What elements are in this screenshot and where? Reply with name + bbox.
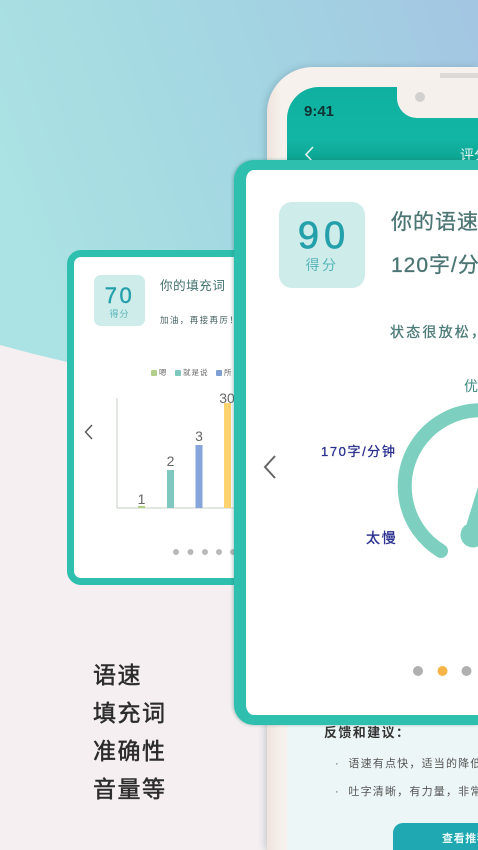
score label: 得分 (109, 309, 130, 319)
pagination dots (413, 666, 472, 676)
back arrow (305, 146, 314, 160)
gauge (398, 403, 478, 558)
large card: speaking speed (234, 160, 478, 725)
label: too slow: 太慢 (366, 530, 398, 546)
score number: 70 (105, 283, 134, 308)
phone speaker (440, 73, 478, 78)
feature: speed: 语速 (93, 662, 142, 688)
chart legend (151, 368, 232, 377)
chart legend: 嗯 (159, 368, 168, 377)
bar chart: 1 (138, 491, 146, 507)
left arrow (264, 455, 276, 479)
legend swatches (151, 370, 157, 376)
feedback panel (287, 707, 478, 850)
gauge arc (405, 410, 478, 551)
phone notch (397, 81, 478, 118)
card heading: 你的填充词 (160, 279, 226, 293)
bar chart: 30 (219, 390, 235, 406)
gauge needle (460, 460, 478, 548)
bar chart: 2 (167, 453, 175, 469)
bar chart (116, 390, 235, 508)
feature: accuracy: 准确性 (93, 738, 166, 764)
score label: 得分 (306, 257, 338, 273)
score badge (94, 275, 145, 326)
feature: volume: 音量等 (93, 776, 166, 802)
phone mockup (267, 67, 478, 850)
status time: 9:41 (304, 103, 334, 120)
score badge (279, 202, 365, 288)
label: speed limit: 170字/分钟 (321, 444, 397, 459)
card message: 加油，再接再厉！ (160, 315, 239, 325)
chart legend: 所 (224, 368, 232, 377)
feature: filler words: 填充词 (93, 700, 166, 726)
feature list (93, 662, 166, 802)
bar chart: 3 (195, 428, 203, 444)
phone camera (415, 92, 425, 102)
phone screen header (287, 87, 478, 177)
card heading: 你的语速 (391, 211, 478, 234)
recommend button (393, 823, 478, 850)
feedback heading: 反馈和建议： (324, 725, 410, 740)
chart legend: 就是说 (183, 368, 208, 377)
score number: 90 (298, 215, 350, 257)
pagination dots (173, 549, 234, 555)
small card: filler words (67, 250, 257, 585)
left arrow (84, 424, 92, 440)
